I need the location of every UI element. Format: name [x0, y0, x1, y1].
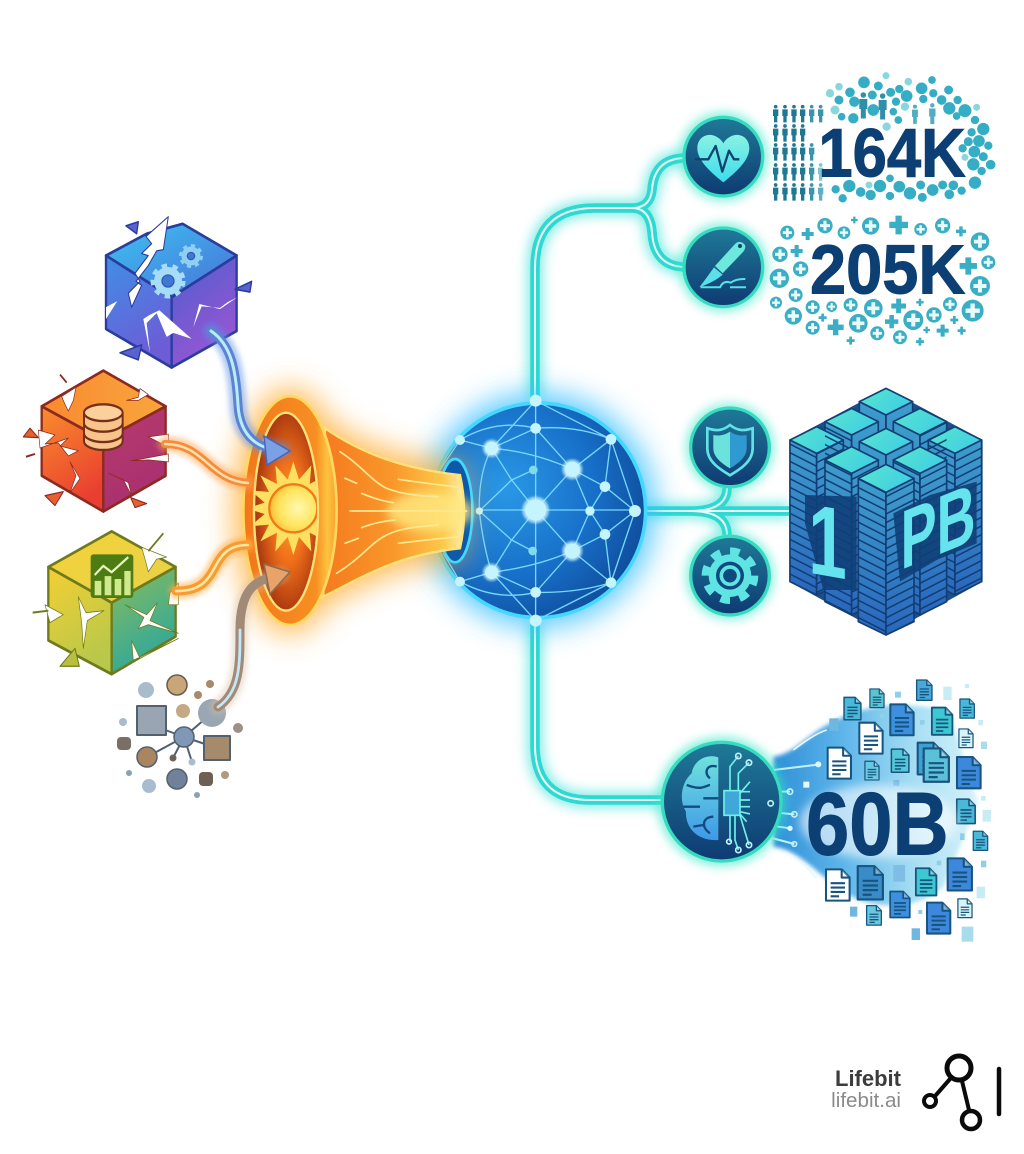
arrow: blue [211, 331, 290, 465]
icon: sun core [255, 462, 317, 555]
icon: heart disc [678, 112, 768, 202]
document icons [826, 680, 988, 934]
stat: 60B documents [657, 680, 991, 942]
number: 60B: 60B [806, 773, 949, 873]
icon: scalpel disc [678, 222, 768, 312]
cube backing [789, 388, 983, 635]
icon: scattered network cluster [117, 675, 243, 798]
icon: brain chip disc [657, 737, 821, 867]
stat: 164K patients [678, 73, 994, 202]
network nodes [455, 395, 641, 627]
connectors: teal tubes from sphere [535, 158, 790, 800]
arrows into funnel [165, 331, 290, 707]
brand url: lifebit.ai [831, 1089, 901, 1112]
stack front [858, 464, 914, 635]
arrow: brown-grey [218, 564, 290, 707]
number: 1: 1 [808, 483, 847, 601]
icon: gear disc [685, 531, 775, 621]
funnel mouth ring [243, 396, 337, 625]
dot cloud [827, 73, 994, 201]
funnel with sun core [233, 387, 473, 634]
left inputs group [23, 217, 252, 798]
number: 205K: 205K [810, 230, 965, 308]
glow behind number [800, 785, 957, 858]
icon: gears [154, 246, 200, 295]
arrow: orange lower [176, 545, 248, 591]
icon: logo mark [924, 1056, 999, 1129]
unit: PB: PB [901, 466, 976, 588]
number: 164K: 164K [818, 115, 966, 192]
stack back [859, 388, 913, 557]
icon: shield disc [685, 402, 775, 492]
funnel cone [323, 428, 464, 597]
brand name: Lifebit [835, 1066, 902, 1091]
brand logo [831, 1056, 999, 1129]
sphere: global data network [422, 394, 655, 627]
arrow: orange upper [165, 444, 248, 483]
stack middle [825, 447, 878, 615]
icon: bar chart [91, 554, 133, 598]
stat: 205K surgeries [678, 216, 995, 346]
faint paper squares [803, 684, 991, 942]
stat: 1 PB storage [685, 388, 983, 635]
cube: orange with database [23, 371, 168, 511]
label backing plates [805, 482, 977, 590]
funnel mouth interior [254, 413, 318, 611]
plus-sign cloud [770, 216, 995, 346]
people grid [773, 92, 936, 201]
icon: database [84, 404, 123, 450]
data flow ribbon [773, 705, 978, 905]
circuit trails [747, 764, 820, 844]
server cube [789, 388, 983, 635]
cube: blue with gears [106, 217, 252, 367]
cube: green with chart [33, 531, 178, 674]
throat ring into sphere [438, 459, 472, 562]
